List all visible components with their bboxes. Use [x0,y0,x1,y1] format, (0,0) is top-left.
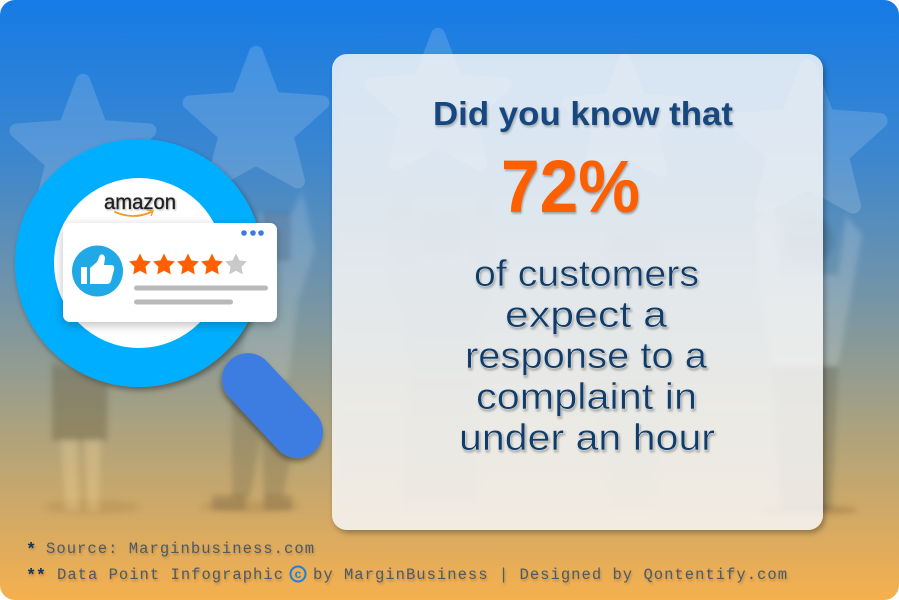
magnifying glass [15,139,334,469]
magnifier handle [211,342,334,469]
person: right, raised arms [755,205,862,515]
body text: of customers [474,253,699,294]
person: centre left, arms raised [390,180,495,510]
background stars [17,35,880,209]
icon: thumbs up [72,246,123,296]
footer: credits: Data Point Infographic [57,566,283,584]
menu dots [241,230,264,236]
icon: copyright [290,566,306,582]
body text: under an hour [459,417,715,458]
footer: credits: by MarginBusiness | Designed by Qontentify.com [313,566,787,584]
body text: expect a [505,294,667,335]
panel: fact card [332,54,823,530]
amazon logo: amazon [104,191,176,214]
review card [63,223,277,322]
person: man with raised arm [200,190,315,513]
review text lines [134,286,268,304]
background people silhouettes [44,180,862,515]
person: centre right [595,223,670,510]
footer: credits [26,566,787,586]
footer: source: Source: Marginbusiness.com [46,540,314,558]
body text: response to a [465,335,707,376]
footer: source: * [26,541,36,560]
person: woman left [44,362,140,514]
heading: Did you know that [433,95,733,132]
body text: complaint in [476,376,697,417]
star rating: 4 of 5 [129,254,247,274]
magnifier ring [15,139,263,387]
footer: credits: ** [26,567,46,586]
statistic: 72% [501,145,640,228]
body text [459,253,715,458]
magnifier lens [54,178,224,348]
icon: copyright: c [295,567,302,581]
